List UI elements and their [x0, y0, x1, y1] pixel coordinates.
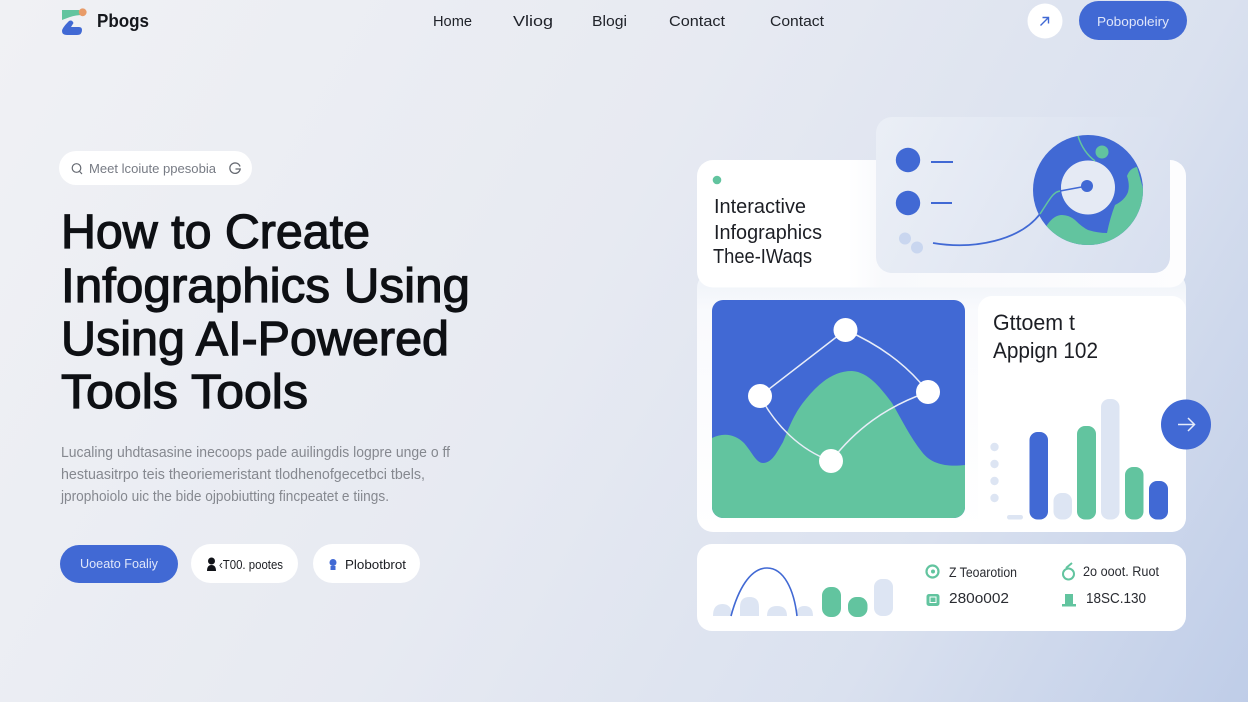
stat: value two: 18SC.130 — [1086, 591, 1146, 607]
chart heading: Appign 102 — [993, 338, 1098, 363]
description: jprophoiolo uic the bide ojpobiutting fincpeatet e tiings. — [60, 488, 389, 505]
stat: value one: 280o002 — [949, 591, 1009, 607]
navigation: Contact — [669, 13, 726, 30]
axis dots — [990, 443, 999, 502]
title: Infographics Using — [61, 260, 470, 313]
search chip — [59, 151, 252, 185]
card heading — [713, 196, 822, 268]
area chart — [712, 300, 965, 518]
primary button — [60, 545, 178, 583]
stat: value two — [1062, 591, 1146, 607]
panel: top card — [697, 160, 1186, 288]
icon: arrow button — [1028, 4, 1062, 38]
card heading: Interactive — [714, 196, 806, 218]
title: Using AI-Powered — [61, 313, 449, 366]
panel: bar chart — [978, 296, 1186, 532]
stat: value one — [926, 591, 1009, 607]
stat: duration — [926, 565, 1017, 580]
card heading: Infographics — [714, 222, 822, 244]
logo — [62, 8, 149, 35]
donut chart — [932, 135, 1143, 246]
mini chart — [713, 568, 893, 617]
description: hestuasitrpo teis theoriemeristant tlodhenofgecetbci tbels, — [61, 466, 425, 483]
stat chip: product — [313, 544, 420, 583]
description — [60, 444, 451, 505]
search chip: Meet lcoiute ppesobia — [89, 161, 217, 176]
title — [61, 206, 470, 419]
logo: Pbogs — [97, 11, 149, 31]
navigation: Contact — [770, 13, 825, 30]
icon: next arrow button — [1161, 400, 1211, 450]
panel: bottom stats card — [697, 544, 1186, 631]
chart heading: Gttoem t — [993, 310, 1075, 335]
stat chip: product: Plobotbrot — [345, 557, 406, 572]
card heading: Thee-IWaqs — [713, 246, 812, 268]
navigation: Vliog — [513, 13, 553, 30]
legend items — [896, 148, 953, 254]
header button: Pobopoleiry — [1097, 14, 1170, 29]
navigation: Blogi — [592, 13, 627, 30]
navigation — [433, 13, 825, 30]
stat: duration: Z Teoarotion — [949, 565, 1017, 580]
status dot — [713, 176, 721, 184]
panel: middle card — [697, 272, 1186, 532]
bars — [1007, 399, 1168, 520]
title: Tools Tools — [61, 366, 308, 419]
navigation: Home — [433, 13, 472, 30]
title: How to Create — [61, 206, 370, 259]
description: Lucaling uhdtasasine inecoops pade auilingdis logpre unge o ff — [61, 444, 451, 461]
stat chip: posts: ‹T00. pootes — [219, 557, 283, 572]
stat: root — [1063, 563, 1159, 580]
primary button: Uoeato Foaliy — [80, 556, 158, 571]
stat chip: posts — [191, 544, 298, 583]
header button — [1079, 1, 1187, 40]
chart heading — [993, 310, 1098, 363]
panel: glass donut chart — [876, 117, 1170, 273]
stat: root: 2o ooot. Ruot — [1083, 564, 1159, 579]
